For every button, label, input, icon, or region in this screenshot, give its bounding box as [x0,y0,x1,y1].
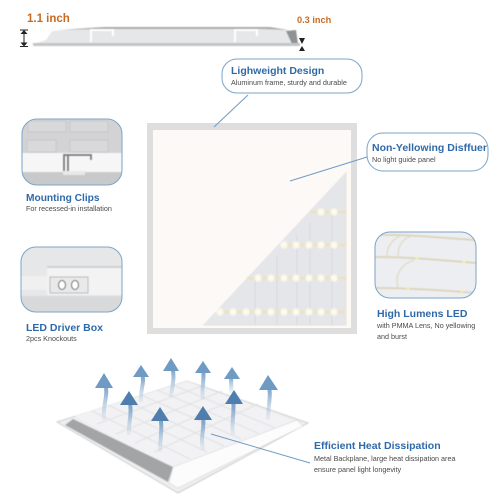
heading: high lumens LED [376,308,475,341]
leader: heat dissipation [211,434,310,463]
heading: efficient heat dissipation: ensure panel light longevity [314,465,402,474]
back arrowheads [95,358,278,390]
panel frame [147,123,357,334]
arrow shafts [104,362,270,452]
LED rows [216,208,346,316]
callout: non-yellowing diffuser: No light guide panel [372,155,436,164]
callout: non-yellowing diffuser: Non-Yellowing Disffuer [372,142,487,154]
frame [57,381,308,493]
heading: efficient heat dissipation: Metal Backplane, large heat dissipation area [314,454,455,463]
diffuser [153,130,351,328]
heading: mounting clips: Mounting Clips [26,193,100,204]
main panel [147,123,357,334]
dimension: 1.1 inch [20,13,70,46]
heading: LED driver box: LED Driver Box [26,322,103,334]
leader: lightweight design [214,95,248,127]
leader: diffuser [290,157,367,181]
callout: lightweight design: Aluminum frame, sturdy and durable [231,78,347,87]
callout: non-yellowing diffuser [367,133,488,171]
heading: high lumens LED: with PMMA Lens, No yellowing [376,321,475,330]
front arrowheads [120,390,243,421]
backplane [75,381,297,470]
photo: high lumens LED [375,232,476,298]
heading: mounting clips: For recessed-in installation [26,204,112,213]
side profile of panel [33,27,300,46]
driver strip [65,419,173,482]
back panel illustration [57,358,308,493]
photo: mounting clips [22,119,122,185]
raised edge [169,420,303,488]
callout: lightweight design: Lighweight Design [231,65,324,77]
dimension: 1.1 inch: 1.1 inch [27,13,70,25]
heat arrows [95,358,278,452]
callout: lightweight design [222,59,362,93]
heading: LED driver box: 2pcs Knockouts [26,334,77,343]
photo: LED driver box [21,247,122,312]
dimension: 0.3 inch: 0.3 inch [297,15,332,25]
heading: efficient heat dissipation [314,440,455,474]
heading: efficient heat dissipation: Efficient Heat Dissipation [314,440,441,452]
heading: high lumens LED: and burst [377,332,407,341]
heading: mounting clips [26,193,112,213]
heading: high lumens LED: High Lumens LED [377,308,468,320]
grid pattern [92,385,275,459]
heading: LED driver box [26,322,103,343]
cutaway LED backplane [203,172,346,325]
dimension: 0.3 inch [297,15,332,51]
